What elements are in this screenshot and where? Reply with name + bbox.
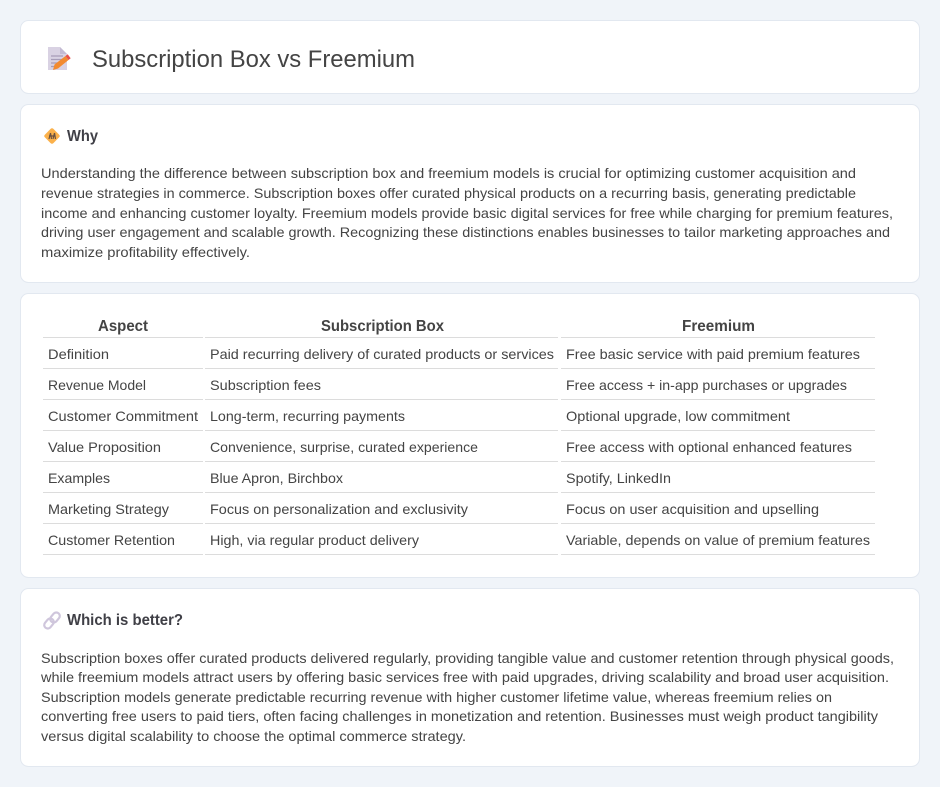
text block: why: revenue strategies in commerce. Subscription boxes offer curated physical products on a recurring basis, generating predictable — [41, 185, 856, 201]
text block: which is better: versus digital scalability to choose the optimal commerce strategy. — [41, 728, 466, 744]
panel: comparison table — [20, 294, 920, 578]
row: examples — [48, 470, 671, 486]
text block: which is better: Subscription boxes offer curated products delivered regularly, providing tangible value and customer retention through physical goods, — [41, 650, 894, 666]
row: revenue model: Free access + in-app purchases or upgrades — [566, 377, 847, 393]
icon: chain link — [43, 611, 61, 630]
row: definition: Free basic service with paid premium features — [566, 346, 860, 362]
row: revenue model — [48, 377, 847, 393]
row: marketing strategy: Focus on personalization and exclusivity — [210, 501, 468, 517]
text block: why — [41, 165, 893, 260]
row: customer commitment: Customer Commitment — [48, 408, 198, 424]
row: definition — [48, 346, 860, 362]
row: customer commitment: Long-term, recurring payments — [210, 408, 405, 424]
text block: which is better — [40, 650, 894, 744]
row: examples: Spotify, LinkedIn — [566, 470, 671, 486]
table header: Freemium — [682, 318, 755, 335]
row: customer retention — [48, 532, 870, 548]
row: definition: Definition — [48, 346, 109, 362]
title: Subscription Box vs Freemium — [92, 46, 415, 73]
row: value proposition: Convenience, surprise, curated experience — [210, 439, 478, 455]
row: customer retention: Customer Retention — [48, 532, 175, 548]
row: customer commitment — [48, 408, 790, 424]
row: examples: Blue Apron, Birchbox — [210, 470, 343, 486]
text block: why: income and enhancing customer loyalty. Freemium models provide basic digital services for free while charging for premium features, — [41, 205, 893, 221]
panel: which is better — [20, 588, 920, 766]
text block: which is better: while freemium models attract users by offering basic services free with paid upgrades, driving scalability and broad user acquisition. — [40, 669, 889, 685]
text block: which is better: Subscription models generate predictable recurring revenue with higher customer lifetime value, whereas freemium relies on — [41, 689, 832, 705]
row: revenue model: Revenue Model — [48, 377, 146, 393]
row: examples: Examples — [48, 470, 110, 486]
row: value proposition: Free access with optional enhanced features — [566, 439, 852, 455]
table header — [98, 318, 755, 335]
row: customer retention: High, via regular product delivery — [210, 532, 419, 548]
panel: header — [20, 20, 920, 94]
row: customer retention: Variable, depends on value of premium features — [566, 532, 870, 548]
heading: why: Why — [67, 128, 98, 145]
row: marketing strategy — [48, 501, 819, 517]
row: value proposition: Value Proposition — [48, 439, 161, 455]
panel: why — [20, 104, 920, 282]
text block: which is better: converting free users to paid tiers, often facing challenges in monetization and retention. Businesses must weigh product tangibility — [41, 708, 878, 724]
heading: which is better: Which is better? — [67, 612, 183, 629]
row: revenue model: Subscription fees — [210, 377, 321, 393]
icon: document with pencil — [48, 47, 71, 70]
row: marketing strategy: Marketing Strategy — [48, 501, 169, 517]
table header: Subscription Box — [321, 318, 444, 335]
text block: why: driving user engagement and scalable growth. Recognizing these distinctions enables businesses to tailor marketing approaches and — [41, 224, 890, 240]
icon: warning diamond — [44, 128, 60, 144]
text block: why: Understanding the difference between subscription box and freemium models is crucial for optimizing customer acquisition and — [41, 165, 856, 181]
row: value proposition — [48, 439, 852, 455]
text block: why: maximize profitability effectively. — [41, 244, 250, 260]
row: definition: Paid recurring delivery of curated products or services — [210, 346, 554, 362]
table header: Aspect — [98, 318, 149, 335]
row: customer commitment: Optional upgrade, low commitment — [566, 408, 790, 424]
row: marketing strategy: Focus on user acquisition and upselling — [566, 501, 819, 517]
